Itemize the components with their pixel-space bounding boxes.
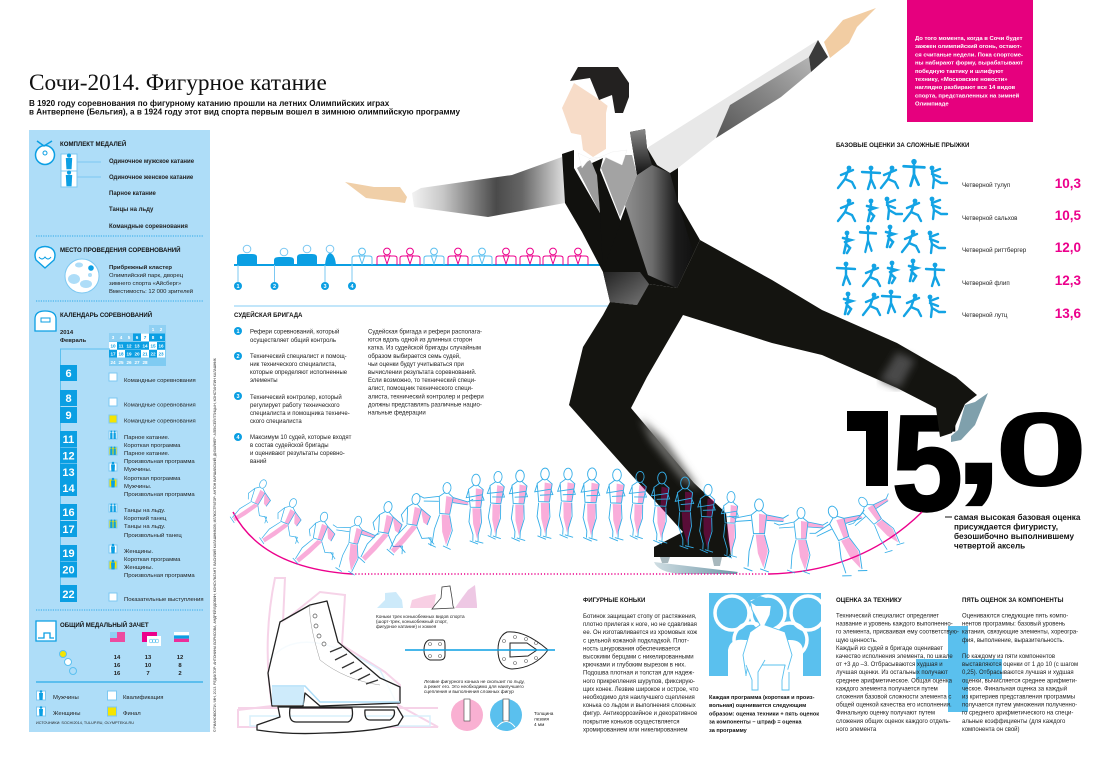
calendar timeline: Произвольная программа: [124, 573, 195, 579]
calendar timeline: Командные соревнования: [124, 418, 196, 424]
panel: judging team text: [234, 311, 484, 465]
small skate types: [377, 585, 477, 609]
calendar grid: 26: [126, 360, 132, 365]
panel: figure skates text: покрытие коньков осуществляется: [583, 719, 679, 725]
panel: medal table: 8: [178, 663, 182, 669]
panel: figure skates text: фигур. Антикоррозийное и декоративное: [583, 710, 698, 717]
judges row: 2: [273, 284, 276, 290]
skater: trousers and boots: [569, 240, 988, 574]
panel: five components: го среднего арифметического на специ-: [962, 711, 1073, 717]
jump sequence curve: [233, 512, 922, 574]
calendar timeline: Мужчины.: [124, 484, 152, 490]
calendar timeline: 16: [62, 507, 75, 519]
calendar timeline: 14: [62, 483, 75, 495]
panel: medal table: 2: [178, 671, 182, 677]
panel: medal set: Парное катание: [109, 191, 157, 197]
panel: five components: [962, 597, 1078, 733]
skater illustration: [345, 8, 988, 574]
skater: far sleeve and hand: [647, 8, 876, 173]
panel: judging team text: Максимум 10 судей, которые входят: [250, 434, 352, 441]
panel: five components: По каждому из пяти компонентов: [962, 654, 1055, 660]
panel: technical score: ного элемента: [836, 727, 877, 733]
legend: Мужчины: [53, 695, 79, 701]
panel: judging team text: должны представлять различные нацио-: [368, 402, 482, 408]
panel: base scores for jumps: Четверной сальхов: [962, 215, 1018, 222]
calendar grid: 2: [160, 327, 163, 332]
calendar timeline: [60, 349, 204, 603]
legend: [36, 690, 163, 725]
panel: skate diagram: Толщина: [534, 711, 554, 716]
panel: calendar: КАЛЕНДАРЬ СОРЕВНОВАНИЙ: [60, 311, 152, 319]
panel: five components: оценки, вычисляется среднее арифмети-: [962, 678, 1077, 684]
calendar grid: 8: [152, 335, 155, 340]
calendar timeline: Произвольный танец: [124, 532, 182, 539]
calendar grid: 9: [160, 335, 163, 340]
panel: technical score: [836, 597, 959, 733]
panel: figure skates text: конька со льдом и выполнения сложных: [583, 703, 696, 709]
panel: medal set: Танцы на льду: [109, 207, 154, 213]
blade plates: [424, 632, 548, 669]
panel: figure skates text: щих конек. Лезвие широкое и острое, что: [583, 687, 699, 693]
panel: judging team text: образом выбирается семь судей,: [368, 353, 461, 360]
calendar timeline: 17: [62, 524, 75, 536]
panel: medal table: 14: [114, 655, 121, 661]
panel: judging team text: ского специалиста: [250, 419, 302, 425]
panel: figure skates text: ее. Он изготавливается из хромовых кож: [583, 630, 697, 636]
legend: Женщины: [53, 711, 81, 717]
legend: Финал: [123, 711, 141, 717]
panel: judging team text: в состав судейской бригады: [250, 442, 329, 449]
panel: judging team text: 3: [236, 394, 240, 400]
calendar timeline: Командные соревнования: [124, 402, 196, 408]
panel: judging team text: регулирует работу технического: [250, 403, 340, 409]
calendar grid: 13: [134, 344, 140, 348]
number: 15,0: 0: [994, 391, 1089, 509]
panel: technical score: каждого элемента получается путем: [836, 686, 938, 692]
panel: five components: выставляются оценки от 1 до 10 (с шагом: [962, 662, 1078, 668]
calendar grid: 5: [128, 335, 131, 340]
calendar timeline: Женщины.: [124, 549, 154, 555]
calendar grid: 7: [144, 335, 147, 340]
panel: technical score: качество исполнения элемента, по шкале: [836, 654, 953, 660]
panel: figure skates text: ФИГУРНЫЕ КОНЬКИ: [583, 597, 645, 604]
panel: figure skates text: ность шнурования обеспечивается: [583, 646, 680, 652]
panel: judging team text: катка. Из судейской бригады случайным: [368, 345, 481, 352]
panel: five components: компонента он свой): [962, 726, 1020, 733]
pink intro panel: наглядно разбирают все 14 видов: [915, 84, 1016, 91]
calendar timeline: Женщины.: [124, 565, 154, 571]
calendar grid: 17: [110, 352, 116, 356]
pink intro panel: ся считаные недели. Пока спортсме-: [915, 52, 1023, 58]
calendar timeline: 11: [63, 434, 74, 446]
calendar timeline: Произвольная программа: [124, 492, 195, 498]
caption: highest base score: самая высокая базовая оценка: [954, 512, 1081, 522]
panel: technical score: го элемента, присваивая ему соответствую-: [836, 630, 959, 636]
pink intro panel: спорта, представленных на зимней: [915, 92, 1020, 99]
judges row: [234, 245, 610, 306]
panel: judging team text: Рефери соревнований, который: [250, 328, 339, 336]
panel: sidebar: [29, 130, 1081, 734]
calendar timeline: 9: [65, 410, 72, 422]
panel: figure skates text: Подошва плотная и толстая для надеж-: [583, 671, 694, 677]
panel: medal table: 7: [146, 671, 150, 677]
calendar grid: 16: [158, 344, 164, 348]
panel: technical score: сложения базовой сложности элемента с: [836, 694, 951, 700]
panel: skate diagram: (шорт-трек, конькобежный спорт,: [376, 618, 448, 624]
pink intro panel: победную тактику и шлифуют: [915, 68, 1004, 75]
panel: medal table: 10: [145, 663, 152, 669]
pink intro panel: [907, 0, 1033, 122]
panel: technical score: от +3 до –3. Отбрасываются худшая и: [836, 662, 943, 668]
panel: base scores for jumps: Четверной лутц: [962, 312, 1008, 319]
calendar grid: 4: [120, 335, 123, 340]
panel: figure skates text: [583, 597, 699, 733]
subtitle: В 1920 году соревнования по фигурному катанию прошли на летних Олимпийских играх: [29, 99, 390, 108]
pink intro panel: зажжен олимпийский огонь, остают-: [915, 43, 1022, 50]
jump sequence figures: [228, 467, 918, 585]
subtitle: в Антверпене (Бельгия), а в 1924 году этот вид спорта первым вошел в зимнюю олимпийскую программу: [29, 108, 460, 116]
panel: judging team text: Если возможно, то технический специ-: [368, 377, 476, 384]
calendar grid: 3: [112, 335, 115, 340]
calendar grid: 23: [158, 352, 164, 356]
panel: technical score: среднее арифметическое. Общая оценка: [836, 678, 953, 684]
panel: base scores for jumps: Четверной тулуп: [962, 182, 1010, 189]
panel: medal table: 13: [145, 655, 152, 661]
panel: figure skates text: крючками и глубоким вырезом в них.: [583, 663, 686, 669]
flag: USA: [110, 632, 125, 642]
calendar grid: 6: [136, 335, 139, 340]
panel: venue: Олимпийский парк, дворец: [109, 272, 184, 279]
number: 15,0: 1: [836, 392, 914, 509]
panel: skate diagram: сцепления и выполнения сложных фигур: [424, 689, 514, 694]
panel: judging team text: элементы: [250, 378, 278, 384]
panel: skate diagram: лезвия: [534, 716, 549, 722]
caption: highest base score: [945, 512, 1081, 550]
calendar timeline: Танцы на льду.: [124, 508, 166, 514]
caption: highest base score: четвертой аксель: [954, 542, 1025, 550]
panel: judging team text: Технический специалист и помощ-: [250, 353, 347, 360]
panel: figure skates text: Ботинок защищает стопу от растяжения,: [583, 614, 697, 620]
panel: judging team text: и оценивают результаты соревно-: [250, 451, 345, 457]
judges row: 4: [350, 284, 354, 290]
panel: five components: катания, связующие элементы, хореогра-: [962, 630, 1078, 636]
panel: skate diagram: а режет его. Это необходимо для наилучшего: [424, 684, 524, 689]
panel: skate diagram: [238, 578, 555, 734]
calendar grid: 19: [126, 352, 132, 356]
panel: medal table: 16: [114, 671, 121, 677]
calendar grid: 10: [110, 344, 116, 348]
panel: five components: нентов программы: базовый уровень: [962, 621, 1065, 628]
jump silhouettes: [837, 159, 947, 317]
number: 15,0: 5: [892, 387, 963, 539]
judges row: 3: [323, 284, 327, 290]
panel: base scores for jumps: [836, 142, 1081, 321]
panel: skate diagram: фигурное катание) и хоккея: [376, 624, 437, 629]
skater: near sleeve and hand: [345, 157, 565, 217]
calendar timeline: Парное катание.: [124, 451, 170, 457]
panel: figure skates text: необходимо для наилучшего сцепления: [583, 695, 695, 701]
calendar timeline: 6: [65, 368, 72, 380]
panel: figure skates text: с цельной кожаной подкладкой. Плот-: [583, 637, 689, 644]
panel: base scores for jumps: БАЗОВЫЕ ОЦЕНКИ ЗА СЛОЖНЫЕ ПРЫЖКИ: [836, 142, 969, 149]
judge caption: Каждая программа (короткая и произ-: [709, 695, 815, 701]
panel: judging team text: осуществляет общий контроль: [250, 337, 336, 344]
calendar timeline: Короткий танец: [124, 515, 167, 522]
panel: figure skates text: ного прикрепления шурупов, фиксирую-: [583, 679, 695, 685]
panel: judging team text: 4: [236, 435, 240, 441]
panel: base scores for jumps: 12,0: [1055, 240, 1081, 255]
calendar timeline: 8: [65, 393, 72, 405]
panel: judging team text: специалиста и помощника техниче-: [250, 411, 350, 417]
judge caption: вольная) оценивается следующим: [709, 703, 806, 709]
panel: judging team text: ник технического специалиста,: [250, 362, 337, 368]
panel: calendar: Февраль: [60, 338, 87, 344]
panel: calendar: [35, 311, 204, 725]
caption: highest base score: безошибочно выполнившему: [954, 531, 1074, 541]
panel: technical score: Каждый из судей в бригаде оценивает: [836, 645, 943, 652]
panel: technical score: название и уровень каждого выполненно-: [836, 622, 953, 628]
panel: venue: зимнего спорта «Айсберг»: [109, 280, 182, 287]
panel: medal table: 16: [114, 663, 121, 669]
panel: figure skates text: хромированием или никелированием: [583, 727, 688, 733]
panel: base scores for jumps: Четверной флип: [962, 280, 1010, 287]
flag: Olympic team: [142, 632, 161, 646]
panel: medal table: 12: [177, 655, 184, 661]
panel: venue: МЕСТО ПРОВЕДЕНИЯ СОРЕВНОВАНИЙ: [60, 246, 181, 254]
calendar grid: [109, 325, 166, 366]
panel: judging team text: ваний: [250, 458, 266, 465]
caption: highest base score: присуждается фигуристу,: [954, 522, 1058, 532]
panel: skate diagram: 4 мм: [534, 722, 544, 727]
panel: judging team text: 1: [236, 329, 240, 335]
calendar timeline: 20: [62, 564, 75, 576]
panel: base scores for jumps: 10,3: [1055, 176, 1081, 191]
calendar grid: 20: [134, 352, 140, 356]
panel: medal table: [36, 621, 189, 677]
panel: five components: получается путем умножения полученно-: [962, 703, 1077, 709]
panel: technical score: ОЦЕНКА ЗА ТЕХНИКУ: [836, 597, 902, 604]
panel: medal set: Одиночное женское катание: [109, 175, 194, 181]
panel: venue: Вместимость: 12 000 зрителей: [109, 288, 193, 295]
panel: base scores for jumps: 12,3: [1055, 273, 1081, 288]
number: 15,0: ,: [952, 355, 1005, 515]
panel: venue: [35, 246, 193, 295]
judge caption: за программу: [709, 728, 748, 734]
number: 15,0: [847, 411, 1082, 513]
panel: judging team text: алист, помощник технического специ-: [368, 386, 473, 392]
calendar grid: 14: [142, 344, 148, 348]
ghost hockey skate: [238, 578, 438, 727]
panel: medal set: КОМПЛЕКТ МЕДАЛЕЙ: [60, 140, 126, 148]
panel: five components: ческое. Финальная оценка за каждый: [962, 685, 1067, 692]
calendar grid: 11: [119, 344, 124, 348]
calendar grid: 15: [150, 344, 156, 348]
calendar grid: 24: [110, 360, 116, 365]
skate blade: [257, 707, 403, 734]
panel: five components: Оцениваются следующие пять компо-: [962, 614, 1068, 620]
panel: medal set: Одиночное мужское катание: [109, 159, 195, 165]
panel: technical score: Финальную оценку получают путем: [836, 711, 935, 717]
calendar grid: 1: [152, 327, 155, 332]
calendar timeline: Короткая программа: [124, 476, 181, 482]
judge caption: за компоненты – штраф = оценка: [709, 719, 802, 726]
panel: five components: 0,25). Отбрасываются лучшая и худшая: [962, 670, 1074, 676]
calendar grid: 12: [126, 344, 132, 348]
pink intro panel: ны набирают форму, вырабатывают: [915, 60, 1023, 67]
panel: judging team text: нальные федерации: [368, 410, 426, 416]
panel: medal table: ОБЩИЙ МЕДАЛЬНЫЙ ЗАЧЕТ: [60, 621, 149, 629]
legend: ИСТОЧНИКИ: SOCHI2014, TULUP.RU, OLYMPTEKA.RU: [36, 721, 134, 725]
panel: technical score: Технический специалист определяет: [836, 612, 939, 620]
vertical credits: © РИАНОВОСТИ / МН, 2013. РЕДАКТОР: АНТОНИНА БОРИСОВА, АНДРЕЙ ВДОВИН; КОНСУЛЬТАНТ: ВАСИЛИЙ КАЛАШНИКОВ; ИЛЛЮСТРАТОР: АНТОН ВАРШАВСКИЙ; ДИЗАЙНЕР: АЛЕКСЕЙ ПТИЦЫН, КОНСТАНТИН КАЛАШНИК: [213, 358, 217, 732]
skater: shirt, collar and tie: [577, 150, 637, 270]
panel: judging team text: ются вдоль одной из длинных сторон: [368, 337, 472, 344]
calendar timeline: Короткая программа: [124, 443, 181, 449]
panel: judging team text: алиста, технический контролер и рефери: [368, 393, 484, 400]
calendar timeline: Мужчины.: [124, 467, 152, 473]
pink intro panel: технику, «Московские новости»: [915, 77, 1008, 83]
panel: medal set: [36, 140, 195, 230]
panel: calendar: 2014: [60, 330, 74, 336]
panel: base scores for jumps: Четверной риттбергер: [962, 247, 1027, 254]
calendar timeline: Короткая программа: [124, 557, 181, 563]
panel: five components: из критериев представления программы: [962, 694, 1075, 700]
panel: skate diagram: Коньки трех конькобежных видов спорта: [376, 614, 465, 619]
panel: judging team text: чьи оценки будут учитываться при: [368, 362, 464, 368]
calendar grid: 18: [118, 352, 124, 356]
panel: technical score: щую ценность.: [836, 638, 878, 644]
calendar grid: 25: [118, 360, 124, 365]
judges row: 1: [236, 284, 240, 290]
calendar timeline: Парное катание.: [124, 435, 170, 441]
flag: Russia: [174, 632, 189, 642]
skater: head: [562, 67, 629, 157]
calendar grid: 21: [142, 352, 148, 356]
pink intro panel: Олимпиаде: [915, 102, 949, 108]
calendar grid: 28: [142, 360, 148, 365]
skater: vest: [562, 129, 700, 305]
icon: blue plus: [916, 626, 1002, 712]
calendar timeline: Произвольная программа: [124, 459, 195, 465]
panel: judging team text: СУДЕЙСКАЯ БРИГАДА: [234, 311, 303, 319]
panel: base scores for jumps: 10,5: [1055, 208, 1081, 223]
figure skate boot: [268, 601, 400, 706]
calendar grid: 22: [150, 352, 156, 356]
judge caption: образом: оценка техники + пять оценок: [709, 710, 819, 717]
panel: judging team text: Судейская бригада и рефери располага-: [368, 328, 482, 336]
panel: judging team text: 2: [236, 354, 240, 360]
calendar timeline: Танцы на льду.: [124, 524, 166, 530]
blade cross-sections: [451, 699, 522, 731]
calendar timeline: 13: [62, 467, 75, 479]
panel: technical score: общей оценкой качества его исполнения.: [836, 702, 952, 709]
calendar timeline: 22: [62, 589, 75, 601]
legend: Квалификация: [123, 695, 163, 701]
panel: five components: фия, выполнение, выразительность.: [962, 638, 1064, 644]
panel: five components: альные коэффициенты (для каждого: [962, 719, 1066, 725]
title: Сочи-2014. Фигурное катание: [29, 70, 327, 96]
panel: five components: ПЯТЬ ОЦЕНОК ЗА КОМПОНЕНТЫ: [962, 597, 1064, 604]
panel: skate diagram: Лезвие фигурного конька не скользит по льду,: [424, 679, 525, 684]
panel: figure skates text: высокими берцами с никелированными: [583, 654, 694, 660]
calendar timeline: Показательные выступления: [124, 597, 204, 603]
panel: figure skates text: плотно прилегая к ноге, но не сдавливая: [583, 622, 697, 628]
panel: venue: Прибрежный кластер: [109, 264, 172, 271]
calendar timeline: Командные соревнования: [124, 378, 196, 384]
panel: judge illustration: [709, 593, 825, 690]
panel: medal set: Командные соревнования: [109, 224, 188, 230]
panel: technical score: сложения общих оценок каждого отдель-: [836, 719, 951, 725]
panel: judging team text: которые определяют исполненные: [250, 370, 348, 376]
calendar grid: 27: [134, 360, 140, 365]
panel: judging team text: вычислении результата соревнований.: [368, 369, 477, 376]
calendar timeline: 12: [62, 450, 75, 462]
pink intro panel: До того момента, когда в Сочи будет: [915, 35, 1023, 42]
panel: base scores for jumps: 13,6: [1055, 306, 1081, 321]
panel: technical score: лучшая оценки. Из остальных получают: [836, 670, 948, 676]
calendar timeline: 19: [62, 548, 75, 560]
panel: judging team text: Технический контролер, который: [250, 394, 342, 401]
